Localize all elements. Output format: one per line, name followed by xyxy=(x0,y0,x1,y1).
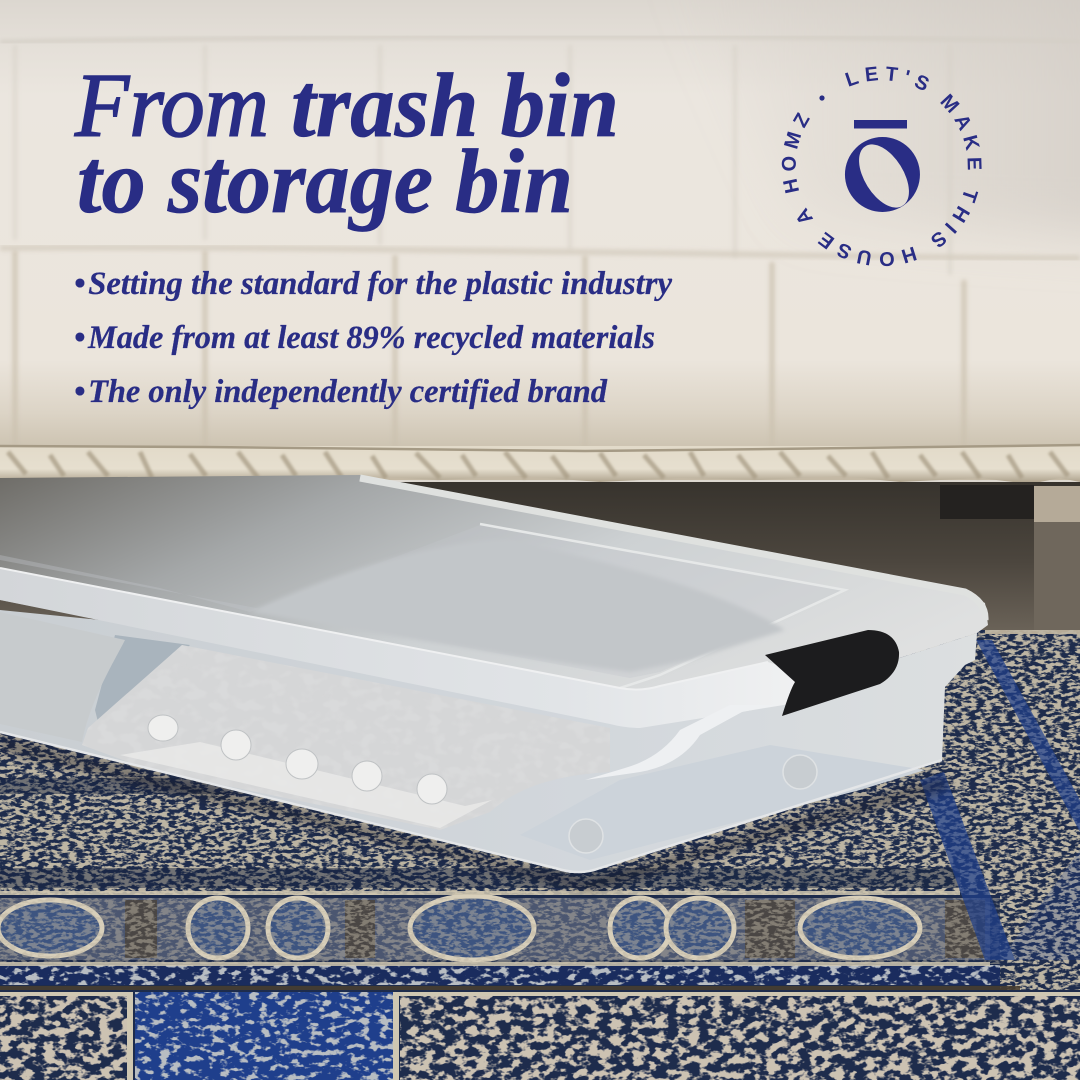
front lid rim xyxy=(0,568,802,728)
bin lid xyxy=(0,475,988,725)
back pillow seen through lid xyxy=(250,540,785,672)
circular slogan: LET'S MAKE THIS HOUSE A HOMZ xyxy=(782,66,982,266)
rug dark horizontal bands xyxy=(0,778,960,888)
clear latch strap xyxy=(585,705,778,780)
title: to storage bin xyxy=(77,131,573,232)
left pillow xyxy=(0,612,125,742)
storage bin xyxy=(0,475,988,873)
separator dot xyxy=(819,95,825,101)
lid recessed panel xyxy=(0,525,845,678)
mattress ruffled piping xyxy=(0,445,1080,484)
title: From trash bin xyxy=(74,55,619,156)
bin bottom edge xyxy=(0,732,942,872)
gap behind pillow xyxy=(95,635,190,730)
bullet: plastic industry standard: • Setting the standard for the plastic industry xyxy=(74,266,672,302)
rug blue diagonal border xyxy=(920,640,1080,960)
bullet: recycled materials: • Made from at least 89% recycled materials xyxy=(74,320,655,356)
rug border lines xyxy=(0,893,1080,1080)
pillowcase buttons xyxy=(148,715,447,804)
bin feet xyxy=(569,755,817,853)
bin body xyxy=(0,610,977,873)
rug blue fields xyxy=(0,965,1000,1080)
lid back edge highlight xyxy=(360,478,985,620)
rug medallion band xyxy=(0,896,990,960)
bin shadow on rug xyxy=(0,735,950,892)
bin floor inner xyxy=(520,745,925,860)
panel: wooden floor xyxy=(0,482,1080,642)
panel: patterned rug xyxy=(0,630,1080,1080)
logo badge xyxy=(782,66,982,266)
bullet: certified brand: • The only independently certified brand xyxy=(74,374,607,410)
black latch handle xyxy=(765,630,899,716)
logo bar xyxy=(854,120,907,128)
title xyxy=(74,55,619,232)
patterned white pillowcase xyxy=(82,645,568,830)
panel: mattress and bedding background xyxy=(0,0,1080,480)
logo ring xyxy=(845,137,920,212)
bullet list xyxy=(74,266,672,410)
